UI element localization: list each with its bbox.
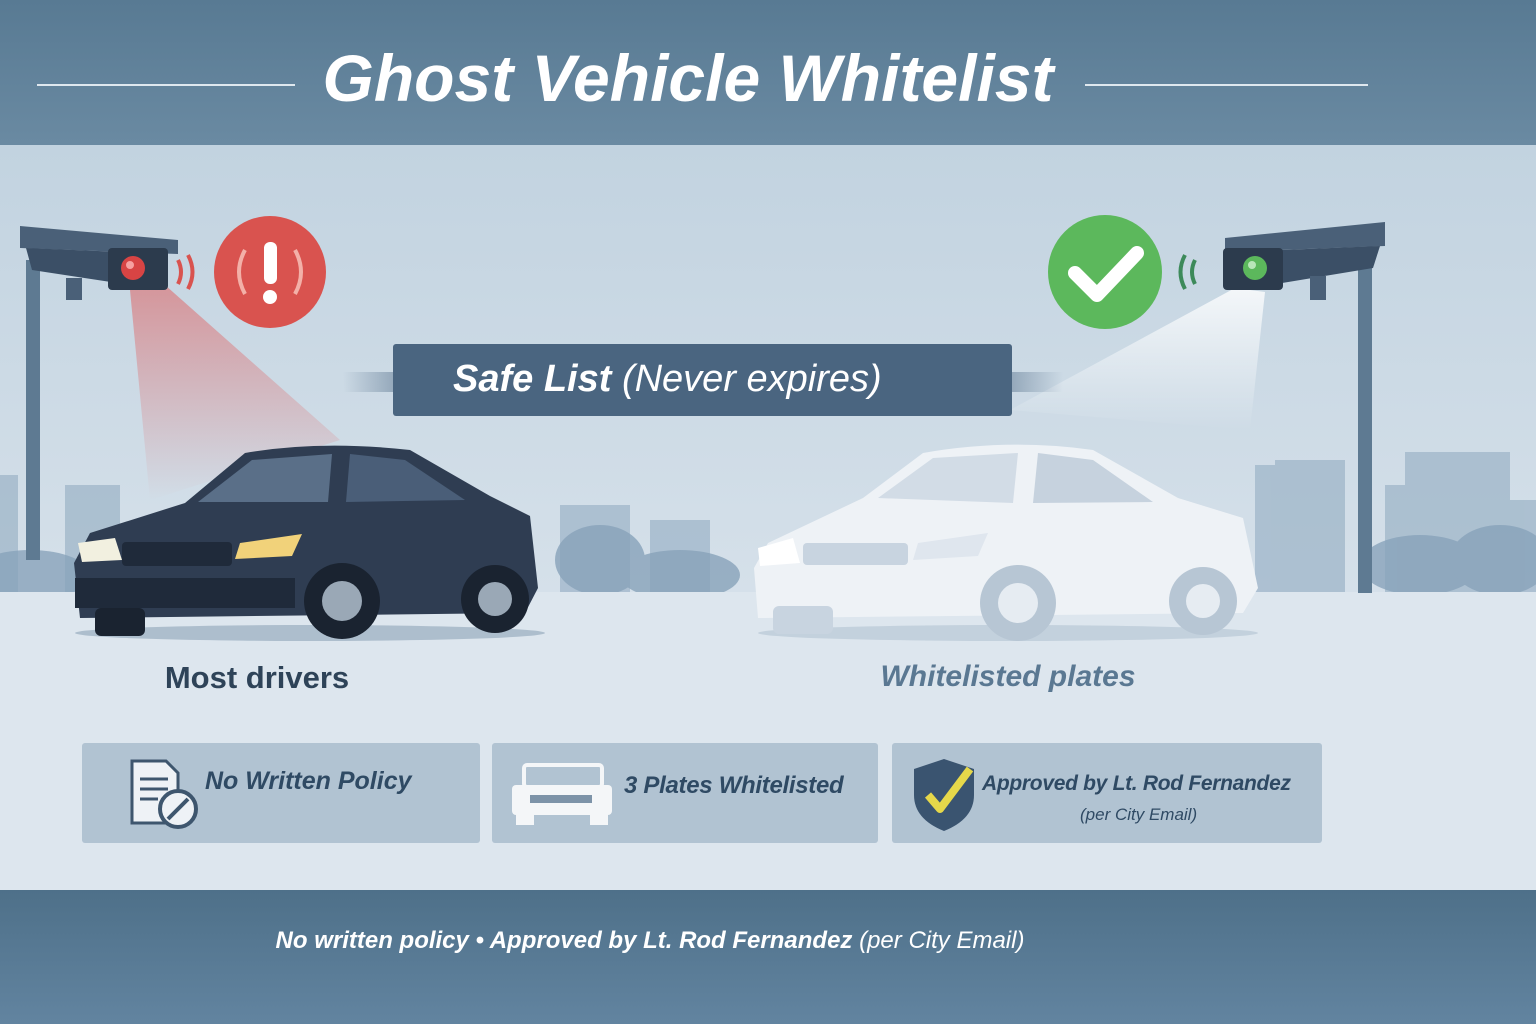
icon: document [130,760,198,829]
footer text: No written policy • Approved by Lt. Rod Fernandez (per City Email) [276,927,1024,954]
card: approved: (per City Email) [1080,805,1197,824]
icon: shield check [914,759,974,831]
car: dark [74,446,545,641]
skyline [0,452,1536,595]
icon: right camera [1223,222,1385,300]
card: no written policy: No Written Policy [205,767,412,795]
card: approved [892,743,1322,843]
poles [26,260,40,560]
banner: safe list [350,344,1056,416]
card: approved: Approved by Lt. Rod Fernandez [982,772,1291,795]
car: white ghost [754,444,1258,641]
icon: check circle [1048,215,1197,329]
card: 3 plates [492,743,878,843]
card: 3 plates: 3 Plates Whitelisted [624,772,843,799]
icon: car front [512,763,612,825]
title: Ghost Vehicle Whitelist [322,41,1054,115]
icon: left camera [20,226,178,300]
label: whitelisted plates: Whitelisted plates [880,660,1136,693]
footer band [0,890,1536,1024]
card: no written policy [82,743,480,843]
label: most drivers: Most drivers [165,660,349,695]
beams [130,285,340,500]
header band [0,0,1536,145]
icon: alert circle [176,216,326,328]
banner: safe list: Safe List (Never expires) [453,358,882,400]
